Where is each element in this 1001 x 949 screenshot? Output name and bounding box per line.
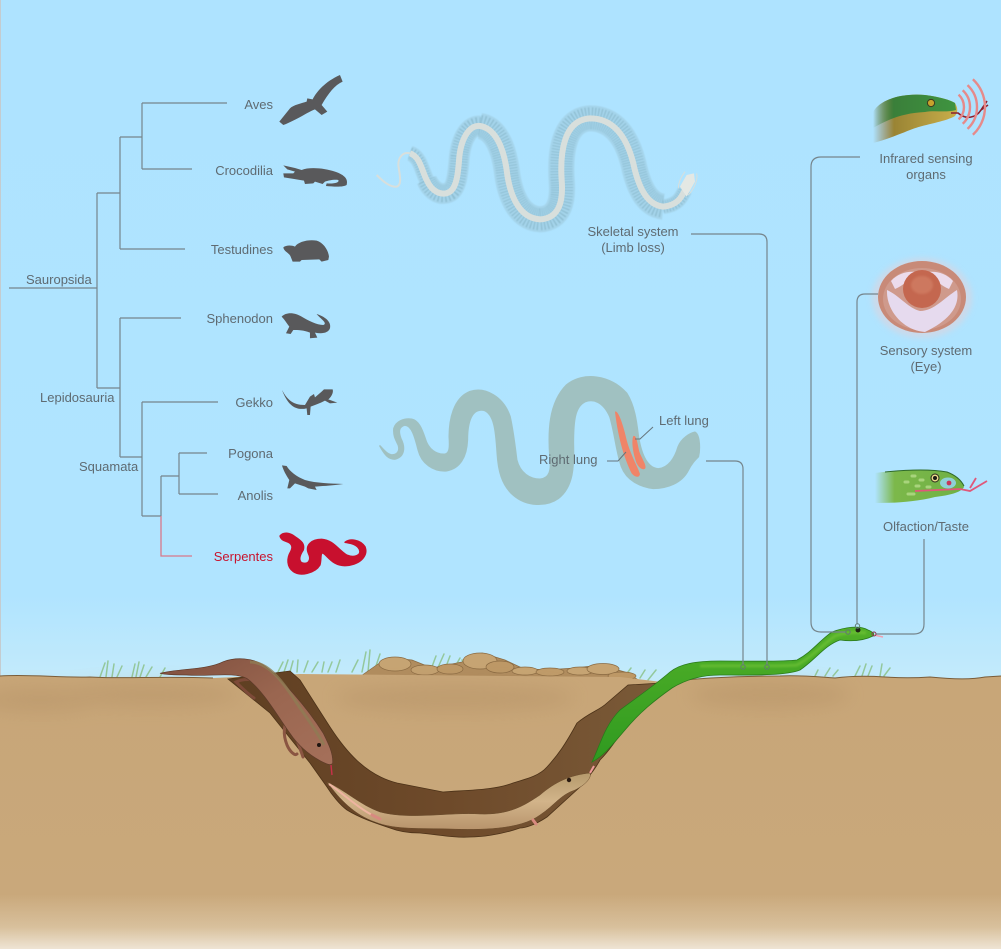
pink belly tail: [329, 784, 374, 816]
ground surface line: [0, 675, 1001, 682]
lizard body: [160, 659, 333, 765]
mouth and tongue: [915, 478, 987, 491]
icon: gecko silhouette: [282, 389, 337, 415]
taxon label: Sphenodon: Sphenodon: [206, 311, 273, 326]
label: right lung: Right lung: [539, 452, 598, 467]
tree branches: [9, 103, 227, 516]
snake body silhouette: [380, 377, 699, 504]
connector end markers: [741, 624, 876, 669]
nasal patch: [940, 478, 956, 488]
taxon label: Crocodilia: Crocodilia: [215, 163, 274, 178]
icon: lizard silhouette: [282, 465, 343, 490]
taxon label: Pogona: Pogona: [228, 446, 274, 461]
rear leg: [372, 815, 380, 819]
eye halo: [872, 258, 972, 338]
icon: red snake silhouette: [280, 533, 366, 574]
connector: eye: [857, 294, 878, 624]
eye lens: [903, 270, 941, 308]
soil shading: [0, 682, 850, 712]
pale inner field: [883, 268, 961, 330]
tongue: [590, 766, 594, 773]
connector: olfaction: [876, 539, 924, 634]
icon: turtle silhouette: [283, 240, 329, 262]
label: left lung: Left lung: [659, 413, 709, 428]
lower white membrane: [887, 290, 958, 332]
dorsal highlight: [700, 632, 866, 666]
vomeronasal organ: [947, 481, 951, 485]
clade label: Squamata: Squamata: [79, 459, 139, 474]
icon: crocodile silhouette: [283, 165, 347, 187]
ground: [0, 674, 1001, 949]
viper head upper scales: [873, 95, 956, 128]
sky background: [0, 0, 1001, 700]
Serpentes branch: [161, 516, 192, 556]
phylogenetic tree: [9, 75, 366, 574]
eye: [931, 474, 939, 482]
body: [327, 773, 590, 829]
snake eye illustration: [872, 258, 972, 338]
left lung: [632, 436, 646, 469]
tongue: [331, 765, 332, 775]
upper membrane left: [891, 272, 916, 289]
upper membrane right: [928, 272, 953, 289]
label: infrared sensing organs: Infrared sensing: [879, 151, 973, 166]
taxon label: Testudines: Testudines: [211, 242, 273, 257]
infrared sensing head illustration: [873, 79, 988, 143]
clade label: Lepidosauria: Lepidosauria: [40, 390, 115, 405]
burrow tunnel: [228, 671, 662, 837]
icon: tuatara silhouette: [282, 313, 330, 338]
front leg: [284, 720, 303, 757]
clade label: Sauropsida: Sauropsida: [26, 272, 93, 287]
label: skeletal system: (Limb loss): [601, 240, 665, 255]
lizard in tunnel: [327, 766, 594, 829]
connector: lungs: [706, 461, 743, 665]
head top shadow: [885, 470, 964, 486]
label: infrared sensing organs: organs: [906, 167, 946, 182]
taxon label: Anolis: Anolis: [238, 488, 273, 503]
grass tufts: [100, 650, 890, 680]
viper tongue: [951, 101, 988, 117]
green snake: [592, 627, 883, 762]
olfaction head illustration: [875, 470, 987, 503]
viper head lower jaw: [873, 95, 957, 143]
label: sensory system: Sensory system: [880, 343, 972, 358]
eye: [567, 778, 571, 782]
leader: right lung: [607, 452, 626, 461]
icon: bird silhouette: [279, 75, 343, 125]
taxon label: Aves: Aves: [244, 97, 273, 112]
body: [592, 627, 874, 762]
infrared arcs: [959, 79, 985, 135]
viper eye: [927, 99, 935, 107]
front leg: [533, 820, 536, 824]
leader: left lung: [635, 427, 653, 439]
right lung: [615, 412, 640, 477]
eye: [317, 743, 321, 747]
tongue: [874, 635, 883, 637]
eye: [856, 628, 860, 632]
taxon label: Gekko: Gekko: [235, 395, 273, 410]
connector: skeletal system: [691, 234, 767, 665]
green head: [875, 470, 964, 503]
eye outer rim: [878, 261, 966, 333]
label: skeletal system: Skeletal system: [587, 224, 679, 239]
snake skeleton illustration: [377, 118, 697, 219]
taxon label: Serpentes: Serpentes: [214, 549, 273, 564]
lizard at burrow entrance: [160, 659, 333, 775]
scale spots: [905, 476, 930, 494]
lens highlight: [911, 276, 933, 294]
connector: infrared: [811, 157, 860, 632]
snake lung diagram: [380, 377, 709, 504]
label: sensory system: (Eye): [910, 359, 942, 374]
olive flank stripe: [250, 662, 324, 745]
rock mound: [358, 653, 642, 682]
rear leg: [236, 679, 264, 698]
label: olfaction/taste: Olfaction/Taste: [883, 519, 969, 534]
